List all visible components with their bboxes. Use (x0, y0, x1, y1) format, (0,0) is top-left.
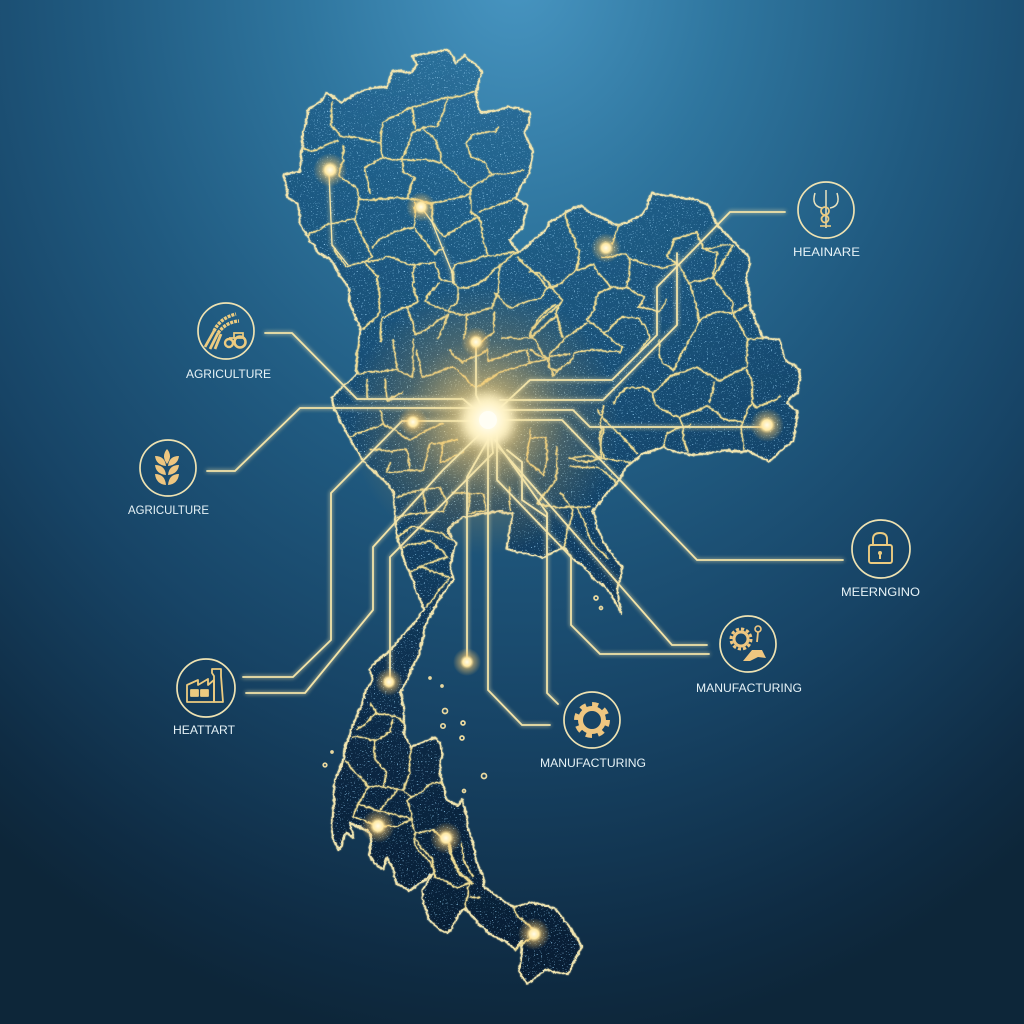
label: lock: MEERNGINO (841, 585, 920, 599)
node (453, 648, 481, 676)
branch: south-east (507, 450, 547, 530)
line: manufacturing right lower (497, 430, 709, 654)
hub core (462, 394, 514, 446)
line: manufacturing vertical (495, 440, 558, 704)
node (313, 153, 347, 187)
central glow over Bangkok (349, 285, 619, 555)
node (750, 408, 784, 442)
label: manufacturing lower: MANUFACTURING (540, 756, 646, 770)
line: north node (476, 342, 488, 420)
node (591, 233, 621, 263)
label: healthcare: HEAINARE (793, 245, 860, 259)
icon: gears and wrench (720, 616, 776, 672)
line: lock (488, 420, 843, 560)
line: healthcare two (500, 253, 677, 400)
icon: caduceus (798, 182, 854, 238)
icon: factory (177, 659, 235, 717)
small islands (323, 596, 602, 792)
circuit lines from hub to icons (207, 173, 843, 725)
line: northern road one (329, 173, 348, 265)
line: manufacturing lower left (488, 425, 550, 725)
node (361, 809, 395, 843)
line: healthcare one (500, 212, 785, 408)
node (430, 822, 462, 854)
map land fill and coast (285, 50, 800, 983)
line: to west coast node (390, 425, 493, 682)
speckled city lights (270, 45, 810, 990)
icon: padlock (852, 520, 910, 578)
line: lower agriculture (207, 408, 478, 471)
line: upper agriculture (265, 333, 488, 420)
glowing city nodes (313, 153, 784, 950)
line: factory upper (243, 421, 488, 677)
label: agriculture lower: AGRICULTURE (128, 503, 209, 517)
node (461, 327, 491, 357)
line: factory lower (246, 432, 482, 693)
icon: wheat (140, 440, 196, 496)
node (398, 407, 428, 437)
line: northern road two (421, 207, 453, 283)
label: manufacturing right: MANUFACTURING (696, 681, 802, 695)
icon: gear (564, 692, 620, 748)
icon: agriculture wheat and tractor (198, 303, 254, 359)
node (375, 668, 403, 696)
label: agriculture upper: AGRICULTURE (186, 367, 271, 381)
node (518, 918, 550, 950)
line: to gulf node (467, 425, 488, 662)
line: manufacturing right upper (497, 445, 707, 645)
province borders (303, 93, 780, 950)
node (406, 192, 436, 222)
map of Thailand (270, 45, 810, 990)
line: east node (500, 410, 767, 427)
label: factory: HEATTART (173, 723, 236, 737)
